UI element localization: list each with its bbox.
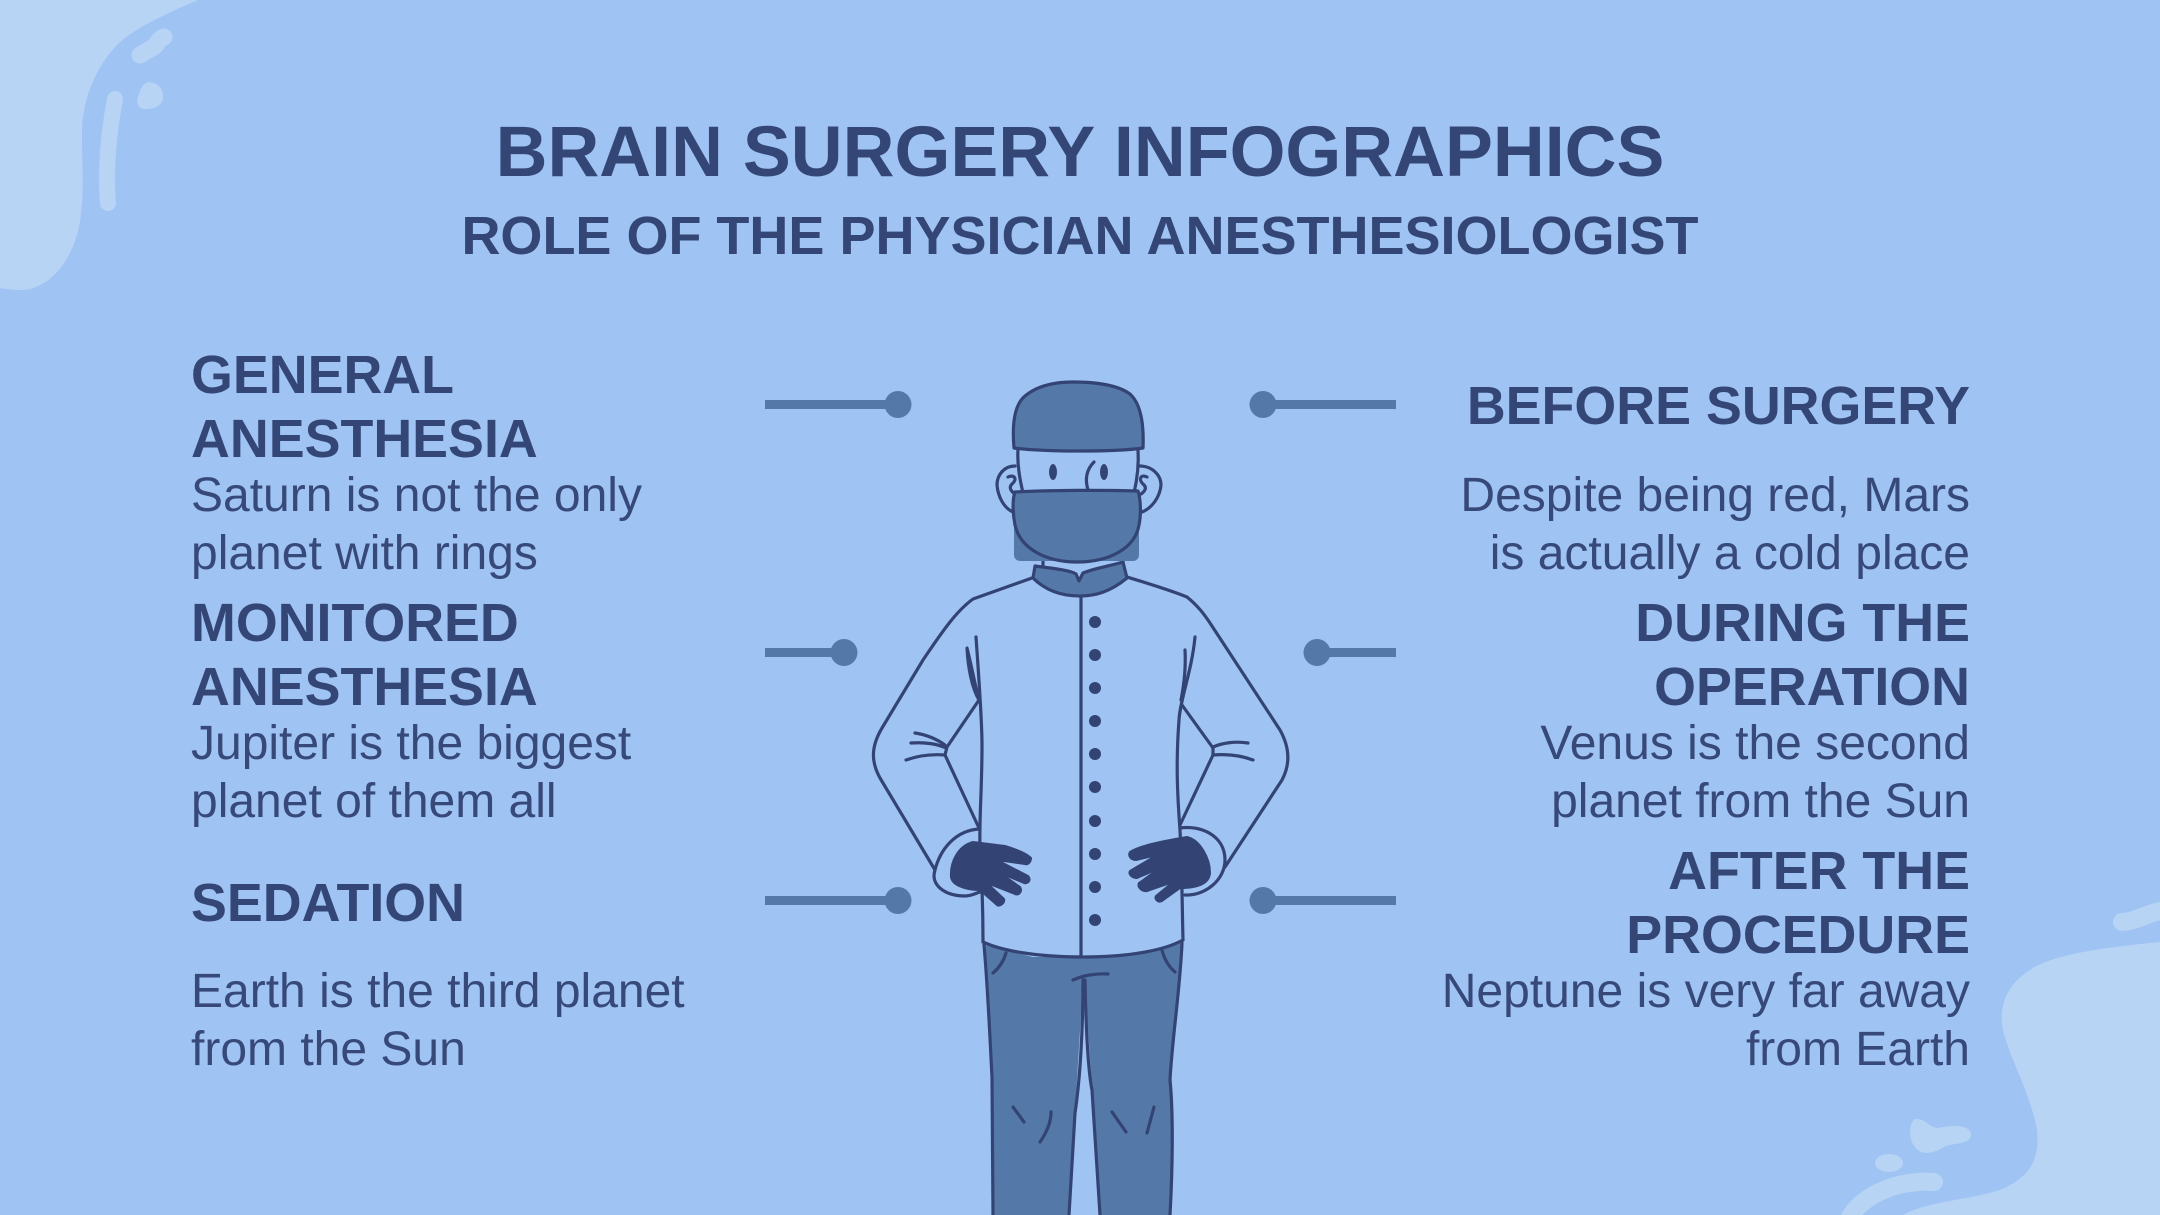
text block: during the operation: planet from the Sun [1551,775,1970,828]
left glove [951,842,1031,906]
text block: during the operation: OPERATION [1654,657,1970,717]
text block: after the procedure: Neptune is very far away [1442,965,1970,1018]
lab coat [873,577,1288,957]
decorative blob: top left [0,0,198,290]
right glove [1129,837,1210,902]
connector: general anesthesia [765,391,912,418]
text block: after the procedure [1442,841,1970,1076]
beard behind mask [1014,505,1139,561]
face [1018,449,1138,493]
text block: monitored anesthesia [191,593,631,828]
text block: general anesthesia: Saturn is not the only [191,469,642,522]
text block: during the operation: DURING THE [1635,593,1970,653]
coat buttons [1089,616,1101,926]
text block: before surgery: is actually a cold place [1490,527,1970,580]
text block: general anesthesia: GENERAL [191,345,454,405]
text block: sedation: SEDATION [191,873,465,933]
text block: monitored anesthesia: Jupiter is the biggest [191,717,631,770]
text block: monitored anesthesia: ANESTHESIA [191,657,538,717]
trousers [984,943,1182,1215]
ears [997,466,1161,512]
text block: monitored anesthesia: planet of them all [191,775,557,828]
surgical mask [1013,490,1140,562]
text block: sedation: Earth is the third planet [191,965,685,1018]
surgical cap [1013,382,1143,451]
text block: after the procedure: AFTER THE [1668,841,1970,901]
connector: after the procedure [1250,887,1396,914]
connector: monitored anesthesia [765,639,858,666]
text block: sedation: from the Sun [191,1023,466,1076]
text block: during the operation [1540,593,1970,828]
connector: before surgery [1250,391,1396,418]
text block: before surgery: BEFORE SURGERY [1467,376,1970,436]
collar [1033,562,1127,596]
neck [1043,560,1123,566]
illustration: physician figure [873,382,1288,1215]
subtitle: ROLE OF THE PHYSICIAN ANESTHESIOLOGIST [461,206,1699,266]
title: BRAIN SURGERY INFOGRAPHICS [496,112,1664,192]
text block: monitored anesthesia: MONITORED [191,593,519,653]
text block: before surgery [1460,376,1970,580]
text block: general anesthesia [191,345,642,580]
text block: general anesthesia: planet with rings [191,527,538,580]
text block: after the procedure: from Earth [1746,1023,1970,1076]
connector: during the operation [1304,639,1396,666]
text block: general anesthesia: ANESTHESIA [191,409,538,469]
decorative blob: bottom right [1850,911,2160,1215]
text block: before surgery: Despite being red, Mars [1460,469,1970,522]
text block: after the procedure: PROCEDURE [1626,905,1970,965]
text block: during the operation: Venus is the second [1540,717,1970,770]
text block: sedation [191,873,685,1076]
connector: sedation [765,887,912,914]
